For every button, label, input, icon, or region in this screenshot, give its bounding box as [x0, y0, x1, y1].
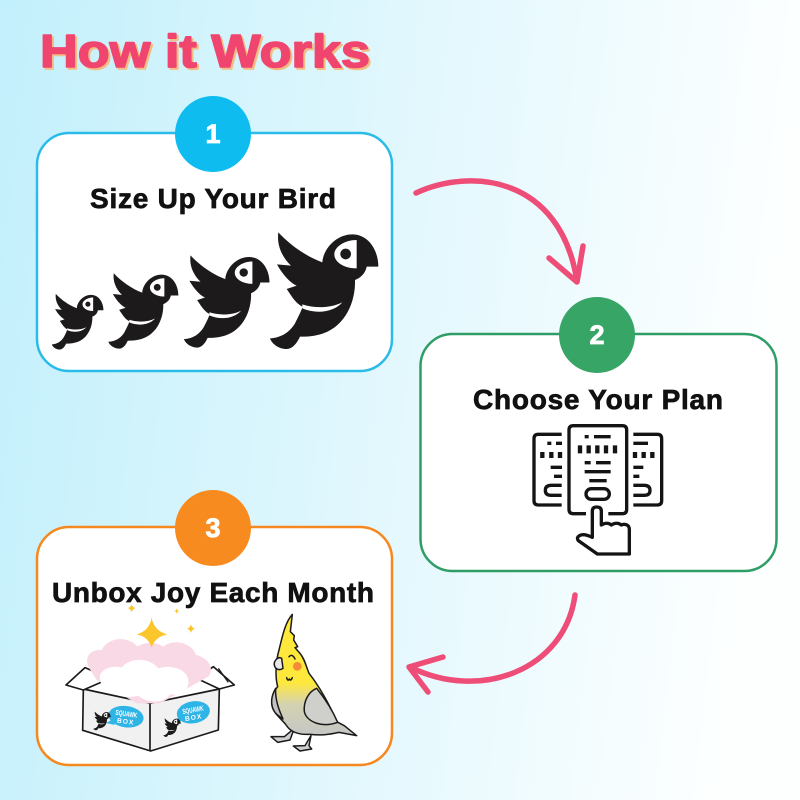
logo right: [163, 699, 212, 737]
logo left: [93, 704, 145, 730]
title: How it Works: [42, 27, 372, 79]
arrow: step 1 to step 2: [416, 181, 583, 282]
panel: step 1 size up your bird: [37, 96, 392, 371]
step 3 badge: [175, 490, 251, 566]
logo left: BOX: [116, 718, 135, 727]
white cloud: [100, 660, 188, 702]
step 2 badge: [559, 297, 635, 373]
logo right: SQUAWK: [182, 704, 205, 716]
panel: step 3 unbox joy each month: [37, 490, 392, 765]
step 1 heading: Size Up Your Bird: [90, 183, 336, 214]
pink cloud: [87, 639, 211, 703]
logo left: SQUAWK: [115, 708, 138, 720]
title: How it Works: [40, 25, 370, 77]
step 2 badge: 2: [589, 320, 605, 350]
box: [83, 689, 219, 751]
step 3 badge: 3: [205, 513, 221, 543]
panel: step 2 choose your plan: [420, 297, 776, 571]
step 3 heading: Unbox Joy Each Month: [52, 577, 374, 608]
illustration: open squawk box with sparkles: [66, 604, 234, 751]
icon: four birds increasing in size: [52, 232, 378, 350]
illustration: cockatiel: [271, 614, 357, 751]
icon: plans with pointing hand: [534, 426, 662, 554]
logo right: BOX: [185, 713, 203, 723]
arrow: step 2 to step 3: [409, 595, 575, 692]
step 2 heading: Choose Your Plan: [473, 384, 723, 415]
gold sparkles: [128, 604, 195, 648]
step 1 badge: [175, 96, 251, 172]
step 1 badge: 1: [205, 119, 221, 149]
